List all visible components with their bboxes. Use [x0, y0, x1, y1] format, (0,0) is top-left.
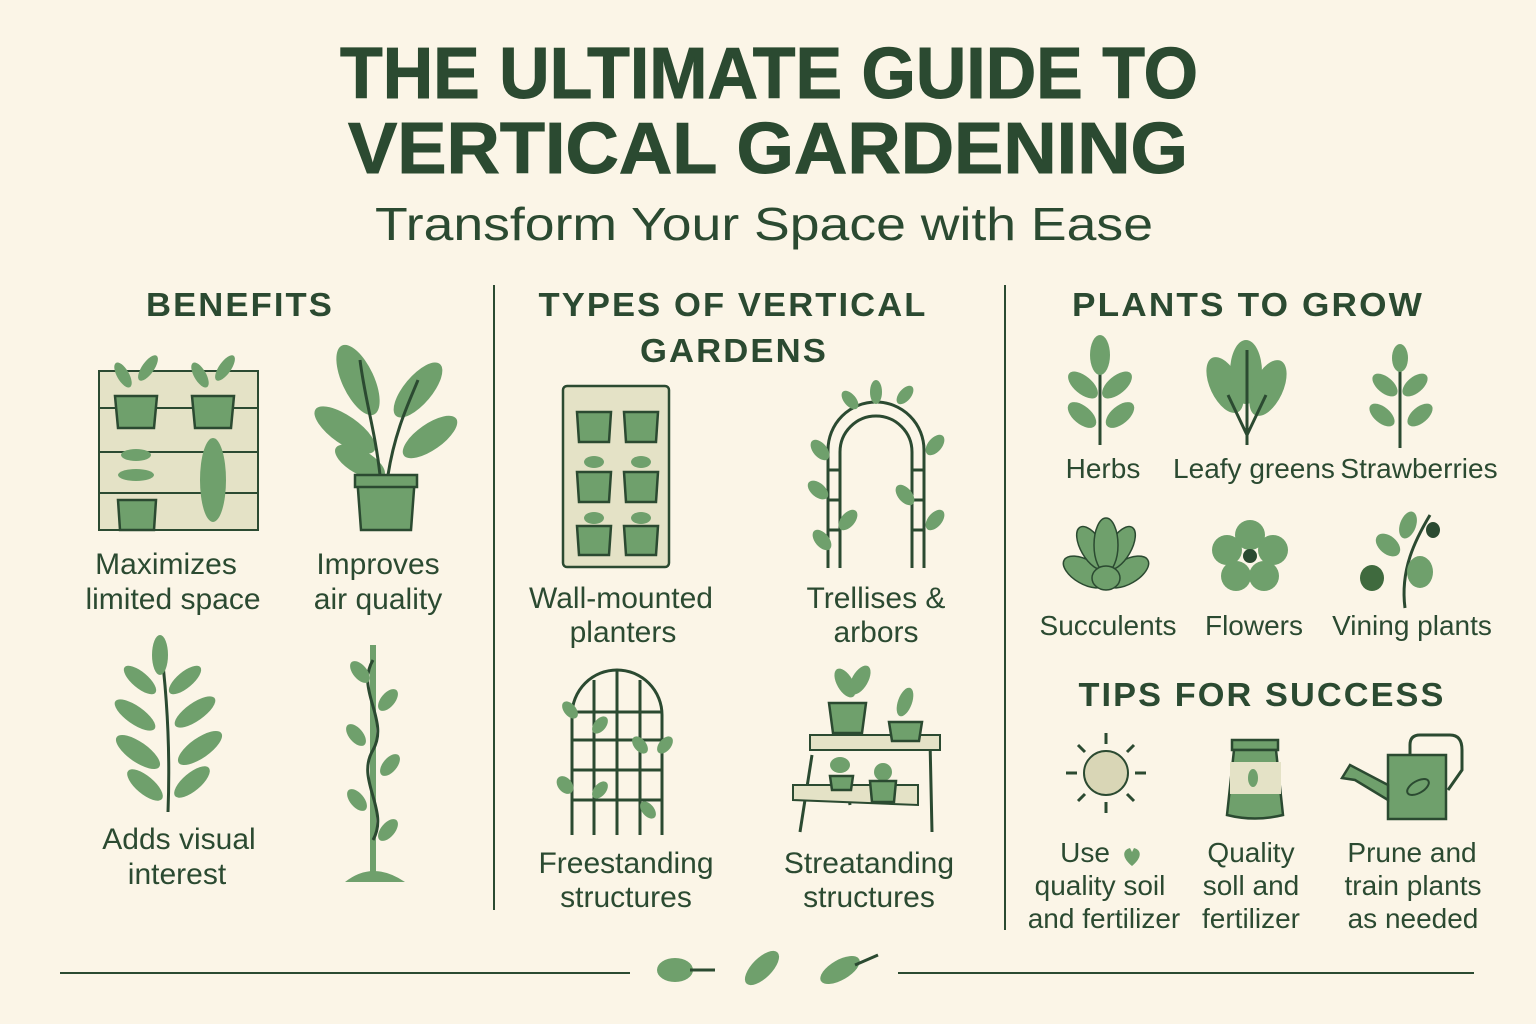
label: streatanding: structures [803, 881, 935, 914]
icon: climbing vine [342, 645, 405, 882]
label: use quality soil: and fertilizer [1028, 903, 1180, 934]
label: wall-mounted [529, 582, 713, 649]
heading: tips for success: TIPS FOR SUCCESS [1078, 676, 1446, 713]
label: quality soll: soll and [1203, 870, 1299, 901]
label: prune: train plants [1345, 870, 1481, 901]
label: adds visual interest: Adds visual [102, 823, 256, 856]
label: trellises [807, 582, 945, 649]
label: trellises: Trellises & [807, 582, 945, 615]
icon: strawberries [1365, 344, 1437, 448]
label: freestanding [538, 847, 714, 914]
heading: types: GARDENS [640, 332, 828, 369]
label: improves: Improves [316, 548, 440, 581]
label: use quality soil [1028, 837, 1180, 934]
label: improves: air quality [314, 583, 442, 616]
icon: herbs [1063, 335, 1139, 445]
icon: watering can [1342, 735, 1462, 819]
icon: plant stand [793, 662, 940, 832]
label: adds visual interest: interest [128, 858, 227, 891]
label: wall-mounted: Wall-mounted [529, 582, 713, 615]
panel: plants [1040, 286, 1498, 641]
panel: tips [1028, 676, 1481, 934]
icon: leafy greens [1199, 340, 1294, 445]
label: improves [314, 548, 442, 616]
title: THE ULTIMATE GUIDE TO [340, 34, 1198, 114]
heading: benefits: BENEFITS [146, 286, 334, 323]
label: vining plants: Vining plants [1332, 610, 1492, 641]
icon: vining plants [1360, 509, 1440, 608]
label: quality soll: Quality [1207, 837, 1295, 868]
footer divider with leaves [60, 945, 1474, 991]
label: prune [1345, 837, 1481, 934]
title [340, 34, 1198, 189]
icon: soil bag [1227, 740, 1283, 818]
label: herbs: Herbs [1066, 453, 1140, 484]
label: flowers: Flowers [1205, 610, 1303, 641]
label: freestanding: structures [560, 881, 692, 914]
label: maximizes: Maximizes [95, 548, 237, 581]
icon: succulents [1058, 518, 1154, 594]
label: maximizes: limited space [85, 583, 261, 616]
icon: wall-mounted [563, 386, 669, 567]
label: streatanding [784, 847, 954, 914]
label: prune: as needed [1348, 903, 1478, 934]
heading: plants to grow: PLANTS TO GROW [1072, 286, 1424, 323]
icon: flower [1212, 520, 1288, 591]
label: wall-mounted: planters [570, 616, 676, 649]
panel: types [529, 286, 954, 914]
icon: freestanding [553, 670, 676, 835]
label: quality soll: fertilizer [1202, 903, 1300, 934]
icon: shelf planter [99, 352, 258, 530]
label: quality soll [1202, 837, 1300, 934]
label: use quality soil: Use [1060, 837, 1110, 868]
heading: types: TYPES OF VERTICAL [538, 286, 928, 323]
label: use quality soil: quality soil [1035, 870, 1165, 901]
icon: potted plant [307, 339, 464, 530]
label: strawberries: Strawberries [1340, 453, 1498, 484]
label: adds visual interest [102, 823, 256, 891]
heading: types [538, 286, 928, 369]
subtitle: Transform Your Space with Ease [375, 198, 1153, 250]
label: freestanding: Freestanding [538, 847, 714, 880]
panel: benefits [85, 286, 464, 891]
icon: branch [110, 635, 227, 812]
title: VERTICAL GARDENING [348, 109, 1188, 189]
icon: trellis arch [804, 380, 948, 568]
label: streatanding: Streatanding [784, 847, 954, 880]
label: succulents: Succulents [1040, 610, 1176, 641]
label: maximizes [85, 548, 261, 616]
icon: sun [1066, 733, 1146, 813]
label: trellises: arbors [833, 616, 919, 649]
label: leafy greens: Leafy greens [1173, 453, 1335, 484]
label: prune: Prune and [1347, 837, 1477, 868]
